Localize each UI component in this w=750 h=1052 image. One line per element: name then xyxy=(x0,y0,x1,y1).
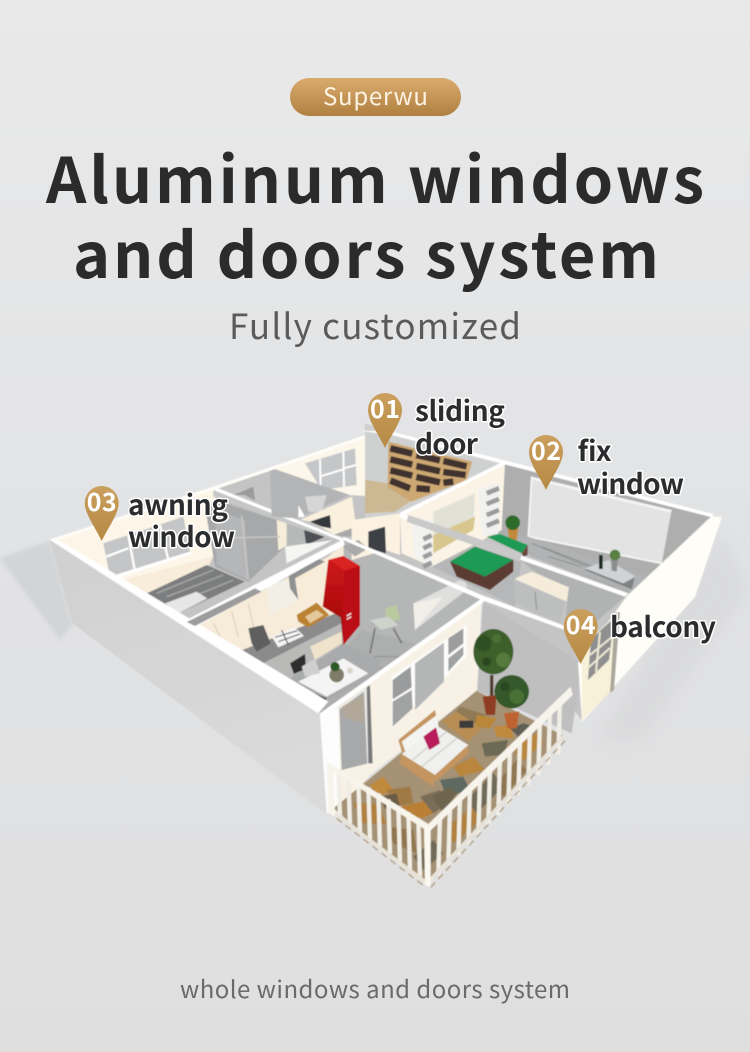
partition strip xyxy=(400,513,628,597)
small closet room xyxy=(285,523,337,563)
balcony xyxy=(320,598,582,887)
pin 01: sliding door xyxy=(368,390,402,448)
label: awning window: window xyxy=(128,516,235,556)
label: sliding door: sliding xyxy=(415,390,505,430)
left outer wall xyxy=(50,541,331,817)
footer caption: whole windows and doors system xyxy=(180,970,570,1005)
label: fix window: window xyxy=(577,463,684,503)
brand pill xyxy=(290,77,461,116)
label: awning window: awning xyxy=(128,484,228,524)
front wall top strip xyxy=(50,539,328,713)
label: awning window xyxy=(128,484,235,556)
balcony window wall xyxy=(320,598,484,813)
subtitle: Fully customized xyxy=(229,299,521,350)
room: billiard room xyxy=(400,462,627,628)
wardrobe xyxy=(205,500,287,582)
room: top left study xyxy=(213,433,375,537)
partition strip xyxy=(213,487,343,540)
refrigerator xyxy=(323,556,360,645)
top wall band xyxy=(50,432,375,541)
pin 03: awning window xyxy=(85,483,119,541)
interior base xyxy=(50,430,718,720)
room: kitchen xyxy=(197,543,345,682)
room: high chair room xyxy=(300,540,482,713)
label: sliding door: door xyxy=(415,423,479,463)
pin 03: awning window: 03 xyxy=(87,483,117,519)
balcony sofa xyxy=(398,710,468,787)
balcony railings xyxy=(327,687,573,887)
pin 04: balcony: 04 xyxy=(566,606,596,642)
library partition top xyxy=(400,461,507,516)
pin 04: balcony xyxy=(564,606,598,664)
plants xyxy=(473,629,529,728)
pin 02: fix window xyxy=(529,432,563,490)
title xyxy=(45,131,704,297)
label: fix window xyxy=(577,430,684,503)
title: and doors system xyxy=(73,206,659,297)
brand pill: Superwu xyxy=(323,77,428,112)
label: sliding door xyxy=(415,390,505,463)
rooms: right half xyxy=(343,423,713,630)
title: Aluminum windows xyxy=(45,131,704,222)
room: library xyxy=(365,423,505,520)
balcony stone floor xyxy=(333,691,565,885)
room: awning window room xyxy=(50,488,245,613)
label: balcony: balcony xyxy=(610,606,716,646)
right outer wall and door xyxy=(578,516,722,722)
ground shadows xyxy=(0,530,750,740)
pin 01: sliding door: 01 xyxy=(370,390,400,426)
kitchen wall top strip xyxy=(185,539,345,627)
room: fix window room xyxy=(498,462,712,593)
center small room xyxy=(343,513,400,560)
label: fix window: fix xyxy=(578,430,612,470)
kitchen floor and dining table xyxy=(285,643,380,703)
side table xyxy=(442,712,482,742)
center wall top strip xyxy=(343,537,567,630)
balcony right gray wall xyxy=(477,602,582,733)
floor plan illustration xyxy=(0,423,750,887)
pin 02: fix window: 02 xyxy=(531,432,561,468)
rooms: left half xyxy=(50,432,380,713)
